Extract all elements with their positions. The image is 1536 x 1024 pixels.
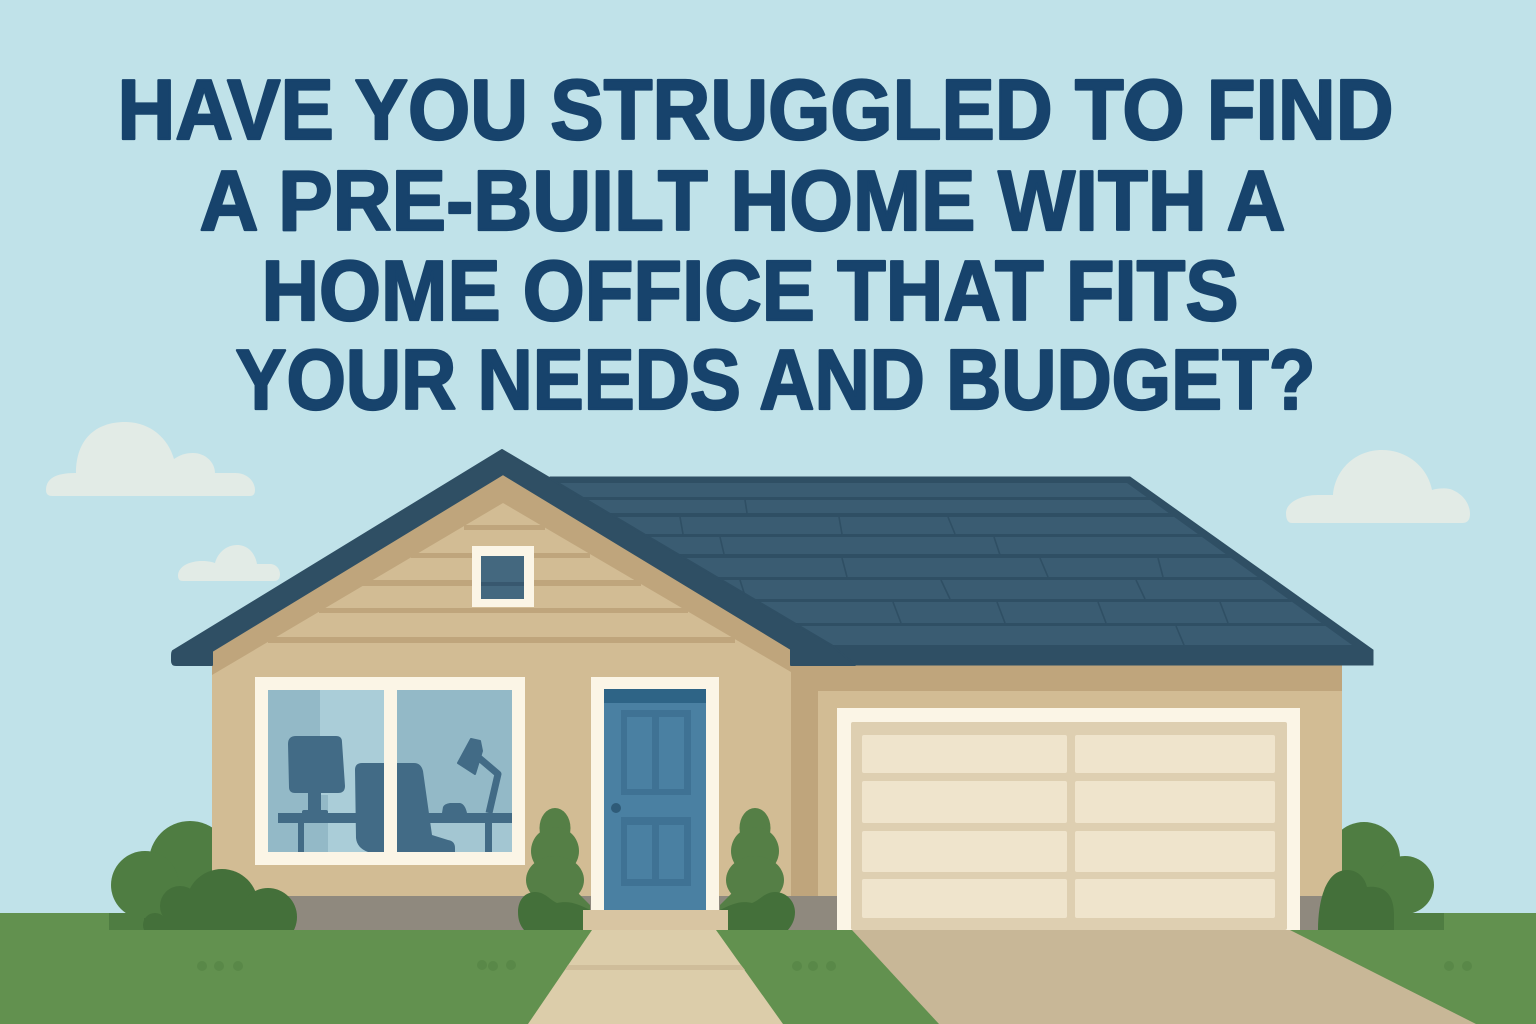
siding lines xyxy=(268,525,735,643)
desk lamp xyxy=(458,739,498,813)
title line 3: HOME OFFICE THAT FITS xyxy=(262,244,1238,339)
desk mouse xyxy=(442,803,467,813)
garage door panels xyxy=(862,735,1275,918)
cypress base xyxy=(518,892,590,930)
garage foundation xyxy=(791,896,1342,930)
house foundation xyxy=(212,896,791,930)
attic window frame xyxy=(472,546,534,607)
title line 1: HAVE YOU STRUGGLED TO FIND xyxy=(118,63,1394,158)
attic window xyxy=(472,546,534,607)
garage door xyxy=(837,708,1300,930)
left glass shade xyxy=(268,690,328,852)
left glass xyxy=(268,690,384,852)
gable and wall fill xyxy=(212,503,791,896)
attic window glass xyxy=(481,556,524,599)
cypress foliage xyxy=(526,808,590,925)
main window: home office view xyxy=(255,677,525,865)
front step xyxy=(583,910,728,930)
door slab xyxy=(604,689,706,910)
right glass xyxy=(397,690,512,852)
monitor xyxy=(288,736,345,815)
shingle field xyxy=(560,483,1352,645)
garage door frame xyxy=(837,708,1300,930)
gable trim xyxy=(212,474,791,896)
garage door body xyxy=(851,722,1287,930)
door frame xyxy=(591,677,719,910)
driveway xyxy=(852,930,1476,1024)
right cypress shrub xyxy=(720,808,795,930)
cypress base xyxy=(720,892,795,930)
shingle courses xyxy=(540,497,1360,645)
right shrub: back layer xyxy=(1342,822,1444,930)
grass tufts xyxy=(197,960,1472,971)
door knob xyxy=(611,803,621,813)
walkway surface xyxy=(528,930,783,1024)
right roof with shingles xyxy=(540,477,1373,665)
lower panel surround xyxy=(621,817,691,886)
garage wall base colour xyxy=(791,665,1342,896)
cloud: lower left xyxy=(178,545,280,581)
cloud: right xyxy=(1286,450,1470,523)
desk xyxy=(278,813,512,852)
attic window slats xyxy=(481,582,524,586)
lamp head xyxy=(458,739,482,774)
left shrub: back layer xyxy=(109,821,212,930)
gable roof edge xyxy=(172,450,855,665)
title line 4: YOUR NEEDS AND BUDGET? xyxy=(236,333,1316,428)
lawn xyxy=(0,913,1536,1024)
window frame xyxy=(255,677,525,865)
front door xyxy=(591,677,719,910)
right shrub: front layer xyxy=(1318,870,1394,930)
garage wall xyxy=(791,665,1342,930)
upper panel right xyxy=(659,717,684,789)
wall shadow beside main house xyxy=(791,665,818,896)
lamp arm xyxy=(478,757,498,813)
left cypress shrub xyxy=(518,808,590,930)
right glass lower highlight xyxy=(430,823,512,852)
lower panel left xyxy=(627,825,652,879)
left shrub: front layer xyxy=(143,869,297,930)
main house wall xyxy=(212,474,791,930)
cypress foliage xyxy=(720,808,785,925)
walkway joint xyxy=(565,965,745,970)
title line 2: A PRE-BUILT HOME WITH A xyxy=(200,154,1286,249)
title xyxy=(118,63,1394,428)
door top band xyxy=(604,689,706,703)
office chair xyxy=(355,763,455,852)
lower panel right xyxy=(659,825,684,879)
roof base xyxy=(540,477,1373,665)
window centre mullion xyxy=(384,690,397,852)
cloud: upper left xyxy=(46,422,255,496)
upper panel left xyxy=(627,717,652,789)
front walkway xyxy=(528,930,783,1024)
garage wall shaded header xyxy=(791,665,1342,691)
upper panel surround xyxy=(621,710,691,795)
